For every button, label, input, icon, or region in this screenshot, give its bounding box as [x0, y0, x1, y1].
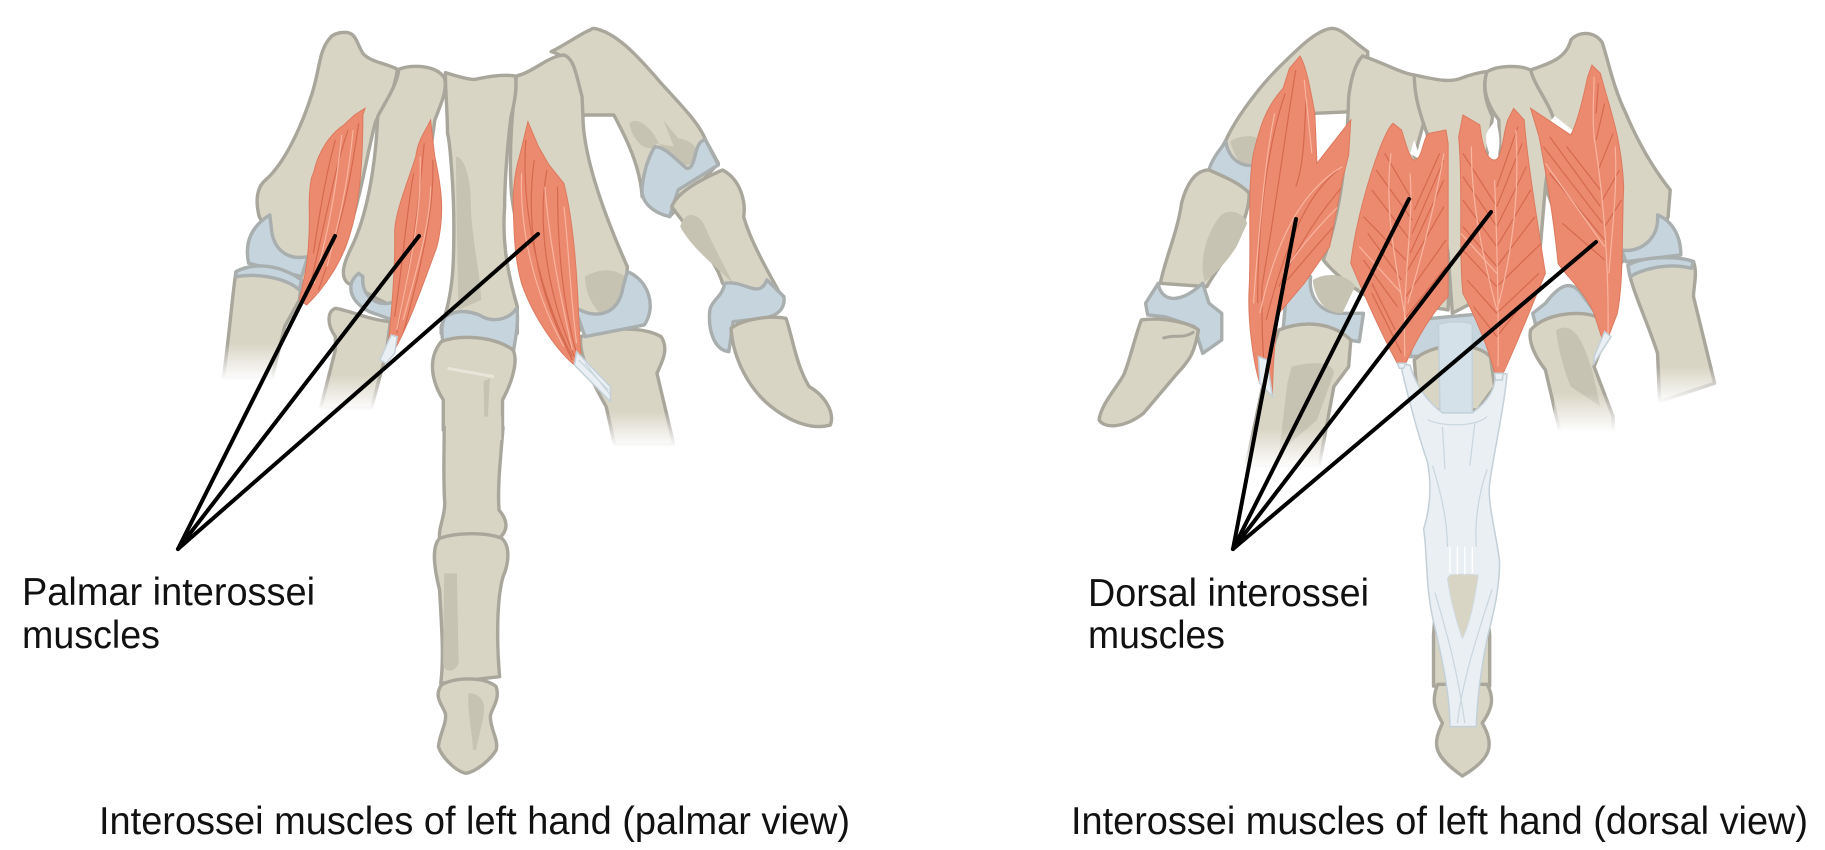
muscle: dorsal interosseous 2: [1351, 123, 1448, 368]
muscle: palmar interosseous 2: [380, 120, 442, 363]
muscle: dorsal interosseous 4: [1531, 65, 1624, 363]
label: dorsal interossei muscles: Dorsal interossei: [1088, 572, 1369, 615]
muscle: dorsal interosseous 3: [1459, 108, 1545, 380]
caption: dorsal view: Interossei muscles of left hand (dorsal view): [1071, 800, 1808, 843]
label: palmar interossei muscles: Palmar interossei: [22, 571, 315, 614]
leader lines: palmar interossei: [178, 234, 538, 549]
panel: dorsal view hand: [1099, 28, 1721, 776]
muscle: dorsal interosseous 1: [1249, 56, 1351, 397]
label: dorsal interossei muscles: muscles: [1088, 614, 1225, 657]
muscle: palmar interosseous 1: [299, 108, 365, 305]
label: palmar interossei muscles: [22, 571, 315, 657]
tendon: dorsal middle finger extensor with bones: [1400, 322, 1507, 776]
caption: palmar view: Interossei muscles of left hand (palmar view): [99, 800, 850, 843]
bones: palmar middle finger lower phalanges: [434, 417, 508, 773]
fade: palmar finger ends: [213, 343, 687, 457]
label: palmar interossei muscles: muscles: [22, 614, 160, 657]
label: dorsal interossei muscles: [1088, 572, 1369, 657]
bones: dorsal view fingers and metacarpals: [1099, 28, 1721, 478]
fade: dorsal finger ends: [1241, 367, 1721, 478]
bones: palmar view fingers and metacarpals: [213, 28, 831, 457]
panel: palmar view hand: [213, 28, 831, 773]
muscles: palmar interossei: [299, 108, 610, 402]
muscle: palmar interosseous 3: [513, 122, 610, 402]
joint: dorsal middle knuckle: [1410, 313, 1499, 410]
leader lines: dorsal interossei: [1233, 199, 1596, 549]
muscles: dorsal interossei: [1249, 56, 1624, 397]
